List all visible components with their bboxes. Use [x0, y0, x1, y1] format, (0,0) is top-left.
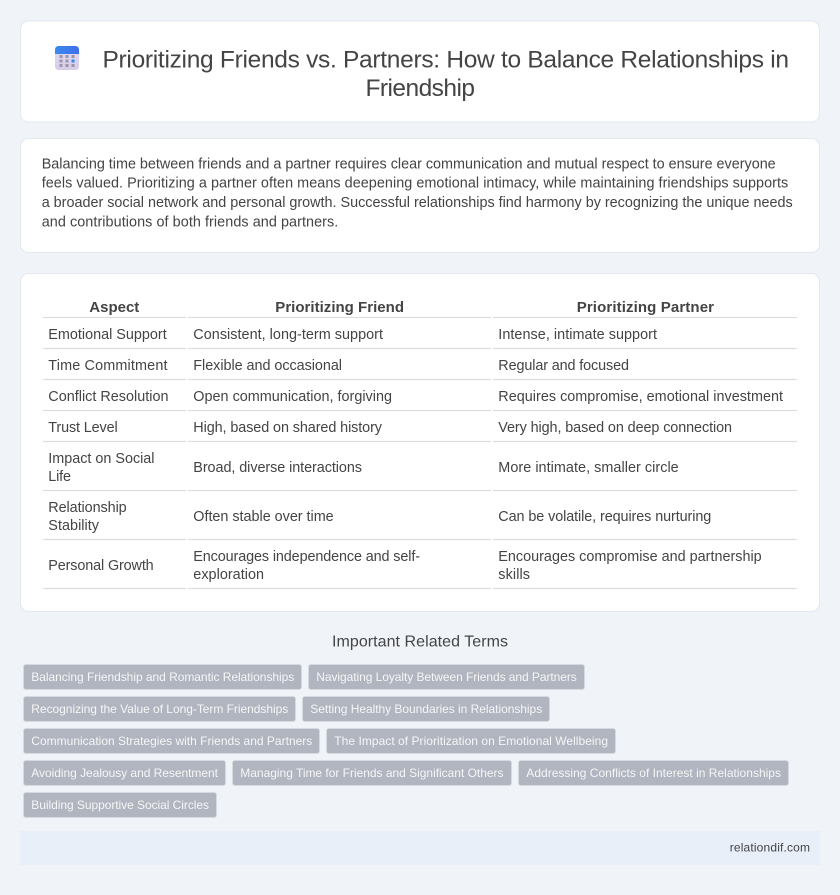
- row: time commitment: Time Commitment: [48, 358, 167, 374]
- tag: [24, 696, 296, 722]
- title: Prioritizing Friends vs. Partners: How to Balance Relationships in: [102, 46, 789, 74]
- panel: introduction text: feels valued. Prioritizing a partner often means deepening emotional intimacy, while maintaining friendships supports: [42, 176, 788, 192]
- table header: Aspect: [89, 299, 139, 316]
- title: Friendship: [366, 75, 475, 102]
- row: trust level: Trust Level: [48, 420, 118, 436]
- row: time commitment: [48, 358, 629, 374]
- row: impact on social life: Life: [48, 469, 71, 485]
- row: personal growth: Encourages independence and self-: [193, 549, 420, 565]
- table header: Prioritizing Partner: [577, 299, 714, 316]
- row: personal growth: [48, 549, 762, 583]
- panel: introduction text: Balancing time between friends and a partner requires clear communication and mutual respect to ensure everyone: [42, 156, 776, 172]
- row: personal growth: Encourages compromise and partnership: [498, 549, 762, 565]
- tag: Balancing Friendship and Romantic Relationships: [31, 670, 294, 684]
- tag: [302, 696, 550, 722]
- tag: Addressing Conflicts of Interest in Relationships: [526, 766, 781, 780]
- tag: Communication Strategies with Friends and Partners: [31, 734, 312, 748]
- row: relationship stability: [48, 500, 711, 534]
- footer: relationdif.com: [730, 840, 810, 854]
- row: time commitment: Flexible and occasional: [193, 358, 342, 374]
- table header: [89, 299, 714, 316]
- title: [102, 46, 789, 102]
- panel: title card: [20, 21, 820, 122]
- row: emotional support: Emotional Support: [48, 327, 167, 343]
- tag: [24, 760, 226, 786]
- row: trust level: Very high, based on deep connection: [498, 420, 732, 436]
- row: relationship stability: Relationship: [48, 500, 127, 516]
- row: emotional support: Consistent, long-term support: [193, 327, 383, 343]
- tag: Managing Time for Friends and Significant Others: [240, 766, 504, 780]
- tag: [518, 760, 788, 786]
- panel: introduction text: and contributions of both friends and partners.: [42, 214, 338, 230]
- panel: introduction text: a broader social network and personal growth. Successful relationships find harmony by recognizing the unique needs: [42, 195, 793, 211]
- tag: [326, 728, 616, 754]
- tag: [308, 664, 584, 690]
- icon: calendar: [55, 46, 79, 70]
- row: impact on social life: Broad, diverse interactions: [193, 460, 362, 476]
- row: time commitment: Regular and focused: [498, 358, 629, 374]
- row: personal growth: skills: [498, 567, 530, 583]
- tag: Building Supportive Social Circles: [31, 798, 209, 812]
- table header: Prioritizing Friend: [275, 299, 404, 316]
- row: emotional support: [48, 327, 657, 343]
- row: conflict resolution: [48, 389, 783, 405]
- tag: The Impact of Prioritization on Emotional Wellbeing: [334, 734, 608, 748]
- related terms tags: [24, 664, 788, 818]
- tag: Setting Healthy Boundaries in Relationships: [310, 702, 542, 716]
- tag: Navigating Loyalty Between Friends and Partners: [316, 670, 577, 684]
- row: trust level: [48, 420, 732, 436]
- tag: [24, 728, 320, 754]
- row: trust level: High, based on shared history: [193, 420, 383, 436]
- tag: Avoiding Jealousy and Resentment: [31, 766, 219, 780]
- row: impact on social life: Impact on Social: [48, 451, 154, 467]
- row: relationship stability: Stability: [48, 518, 100, 534]
- row: emotional support: Intense, intimate support: [498, 327, 657, 343]
- panel: comparison table: [20, 274, 820, 612]
- row: relationship stability: Often stable over time: [193, 509, 334, 525]
- row: personal growth: Personal Growth: [48, 558, 154, 574]
- tag: Recognizing the Value of Long-Term Friendships: [31, 702, 288, 716]
- tag: [24, 792, 216, 818]
- tag: [24, 664, 302, 690]
- footer: [20, 831, 820, 865]
- heading: important related terms: Important Related Terms: [332, 634, 508, 651]
- row: relationship stability: Can be volatile, requires nurturing: [498, 509, 711, 525]
- row: conflict resolution: Conflict Resolution: [48, 389, 168, 405]
- row: conflict resolution: Open communication, forgiving: [193, 389, 392, 405]
- row: conflict resolution: Requires compromise, emotional investment: [498, 389, 783, 405]
- row: personal growth: exploration: [193, 567, 264, 583]
- panel: introduction text: [20, 138, 820, 252]
- row: impact on social life: More intimate, smaller circle: [498, 460, 679, 476]
- tag: [232, 760, 512, 786]
- row: impact on social life: [48, 451, 679, 485]
